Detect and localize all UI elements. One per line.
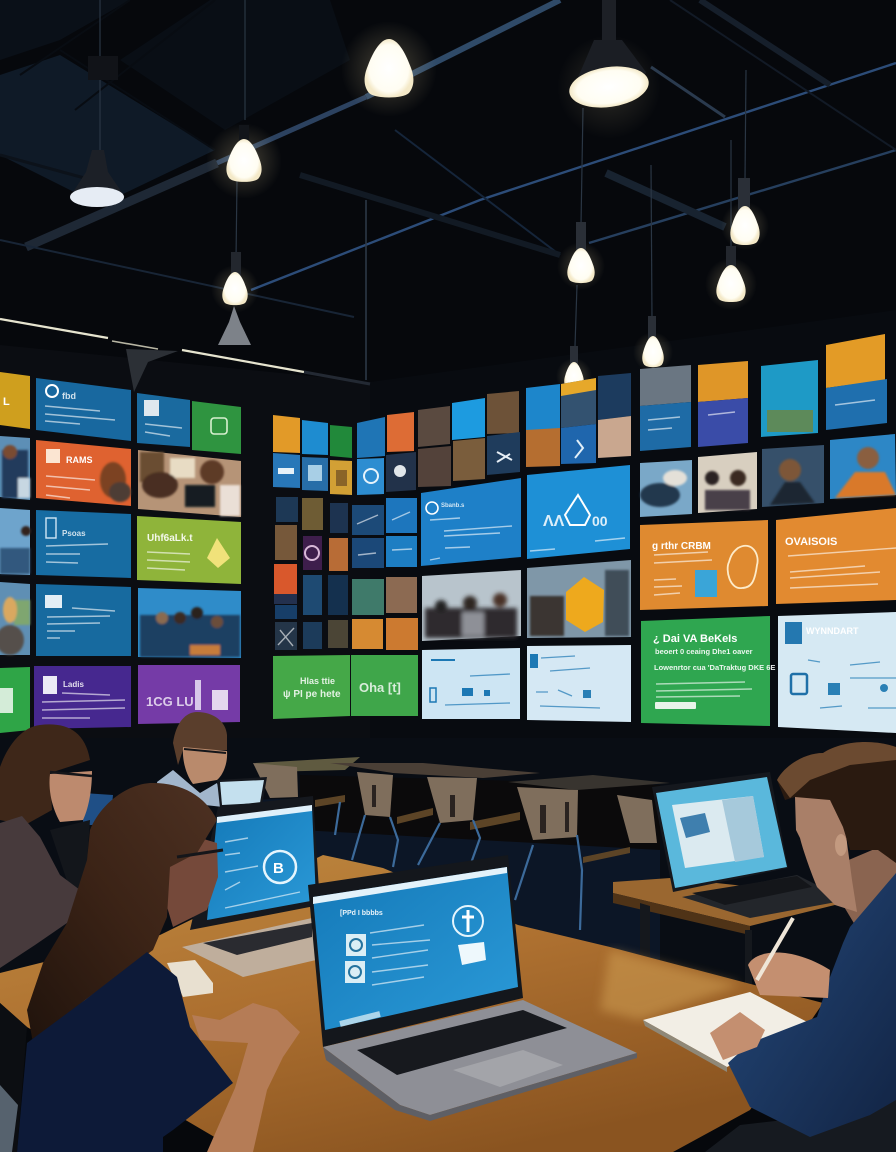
bulbs — [239, 125, 249, 145]
black shade lamp left — [88, 56, 118, 80]
glows — [206, 123, 282, 199]
photo panel crowd — [422, 570, 521, 641]
person: far student at back — [157, 712, 227, 807]
white diagram panel — [778, 612, 896, 733]
right wall panels: OVAISOIS — [785, 536, 837, 548]
big shade right — [602, 0, 616, 42]
right back table — [613, 878, 847, 985]
right wall panels: beoert 0 ceaing Dhe1 oaver — [655, 647, 753, 656]
left wall panels — [0, 372, 241, 733]
left wall panels: RAMS — [66, 455, 92, 465]
person: woman left — [0, 724, 113, 968]
right wall panels: WYNNDART — [806, 626, 859, 636]
center grid panels: ΛΛ — [543, 513, 565, 530]
left wall panels: Uhf6aLk.t — [147, 533, 193, 544]
left wall panels: L — [3, 396, 10, 408]
orange panel one — [640, 520, 768, 610]
small cone — [218, 306, 251, 345]
ceiling beams and rails — [0, 0, 896, 380]
left wall panels: fbd — [62, 391, 76, 401]
blue wide panel — [421, 478, 521, 566]
wall light strip — [0, 319, 370, 392]
person: woman front left — [17, 783, 300, 1152]
laptop: rear left student — [182, 796, 320, 977]
bright blue panel — [527, 465, 630, 559]
laptop: front centre: [PPd I bbbbs — [340, 910, 383, 917]
right wall panels: Lowenrtor cua 'DaTraktug DKE 6E — [654, 663, 775, 672]
left wall panels: Ladis — [63, 680, 84, 689]
white info panels — [422, 648, 520, 719]
papers on table — [167, 960, 813, 1072]
chair seats — [315, 795, 630, 863]
green panel — [641, 616, 770, 726]
center-left small panel wall — [273, 415, 418, 719]
laptop: small laptop behind — [217, 777, 267, 808]
laptop: rear left student: B — [273, 860, 284, 877]
center-left small panel wall: ψ PI pe hete — [283, 689, 341, 700]
table tops — [255, 757, 360, 772]
person: young man right — [705, 742, 896, 1152]
photo row — [640, 460, 692, 517]
laptop: right — [652, 772, 847, 918]
left wall panels: 1CG LU — [146, 694, 194, 709]
pendant lights — [70, 0, 769, 394]
chair backs — [253, 763, 657, 843]
center grid panels — [352, 373, 631, 722]
chair legs — [335, 802, 582, 930]
laptop: front centre — [308, 855, 637, 1121]
back room tables and chairs — [0, 738, 896, 988]
photo panel yellow badge — [527, 560, 631, 638]
right wall panels — [640, 334, 896, 733]
foreground chair shadow — [0, 1003, 27, 1152]
center-left small panel wall: Hlas ttie — [300, 676, 335, 686]
left wall panels: Psoas — [62, 529, 86, 538]
right wall panels: ¿ Dai VA BeKeIs — [653, 633, 737, 645]
center grid panels: 00 — [592, 513, 608, 529]
center grid panels: Sbanb.s — [441, 503, 465, 509]
right wall panels: g rthr CRBM — [652, 541, 711, 552]
main table — [0, 855, 823, 1152]
orange panel two — [776, 508, 896, 604]
center-left small panel wall: Oha [t] — [359, 680, 401, 695]
